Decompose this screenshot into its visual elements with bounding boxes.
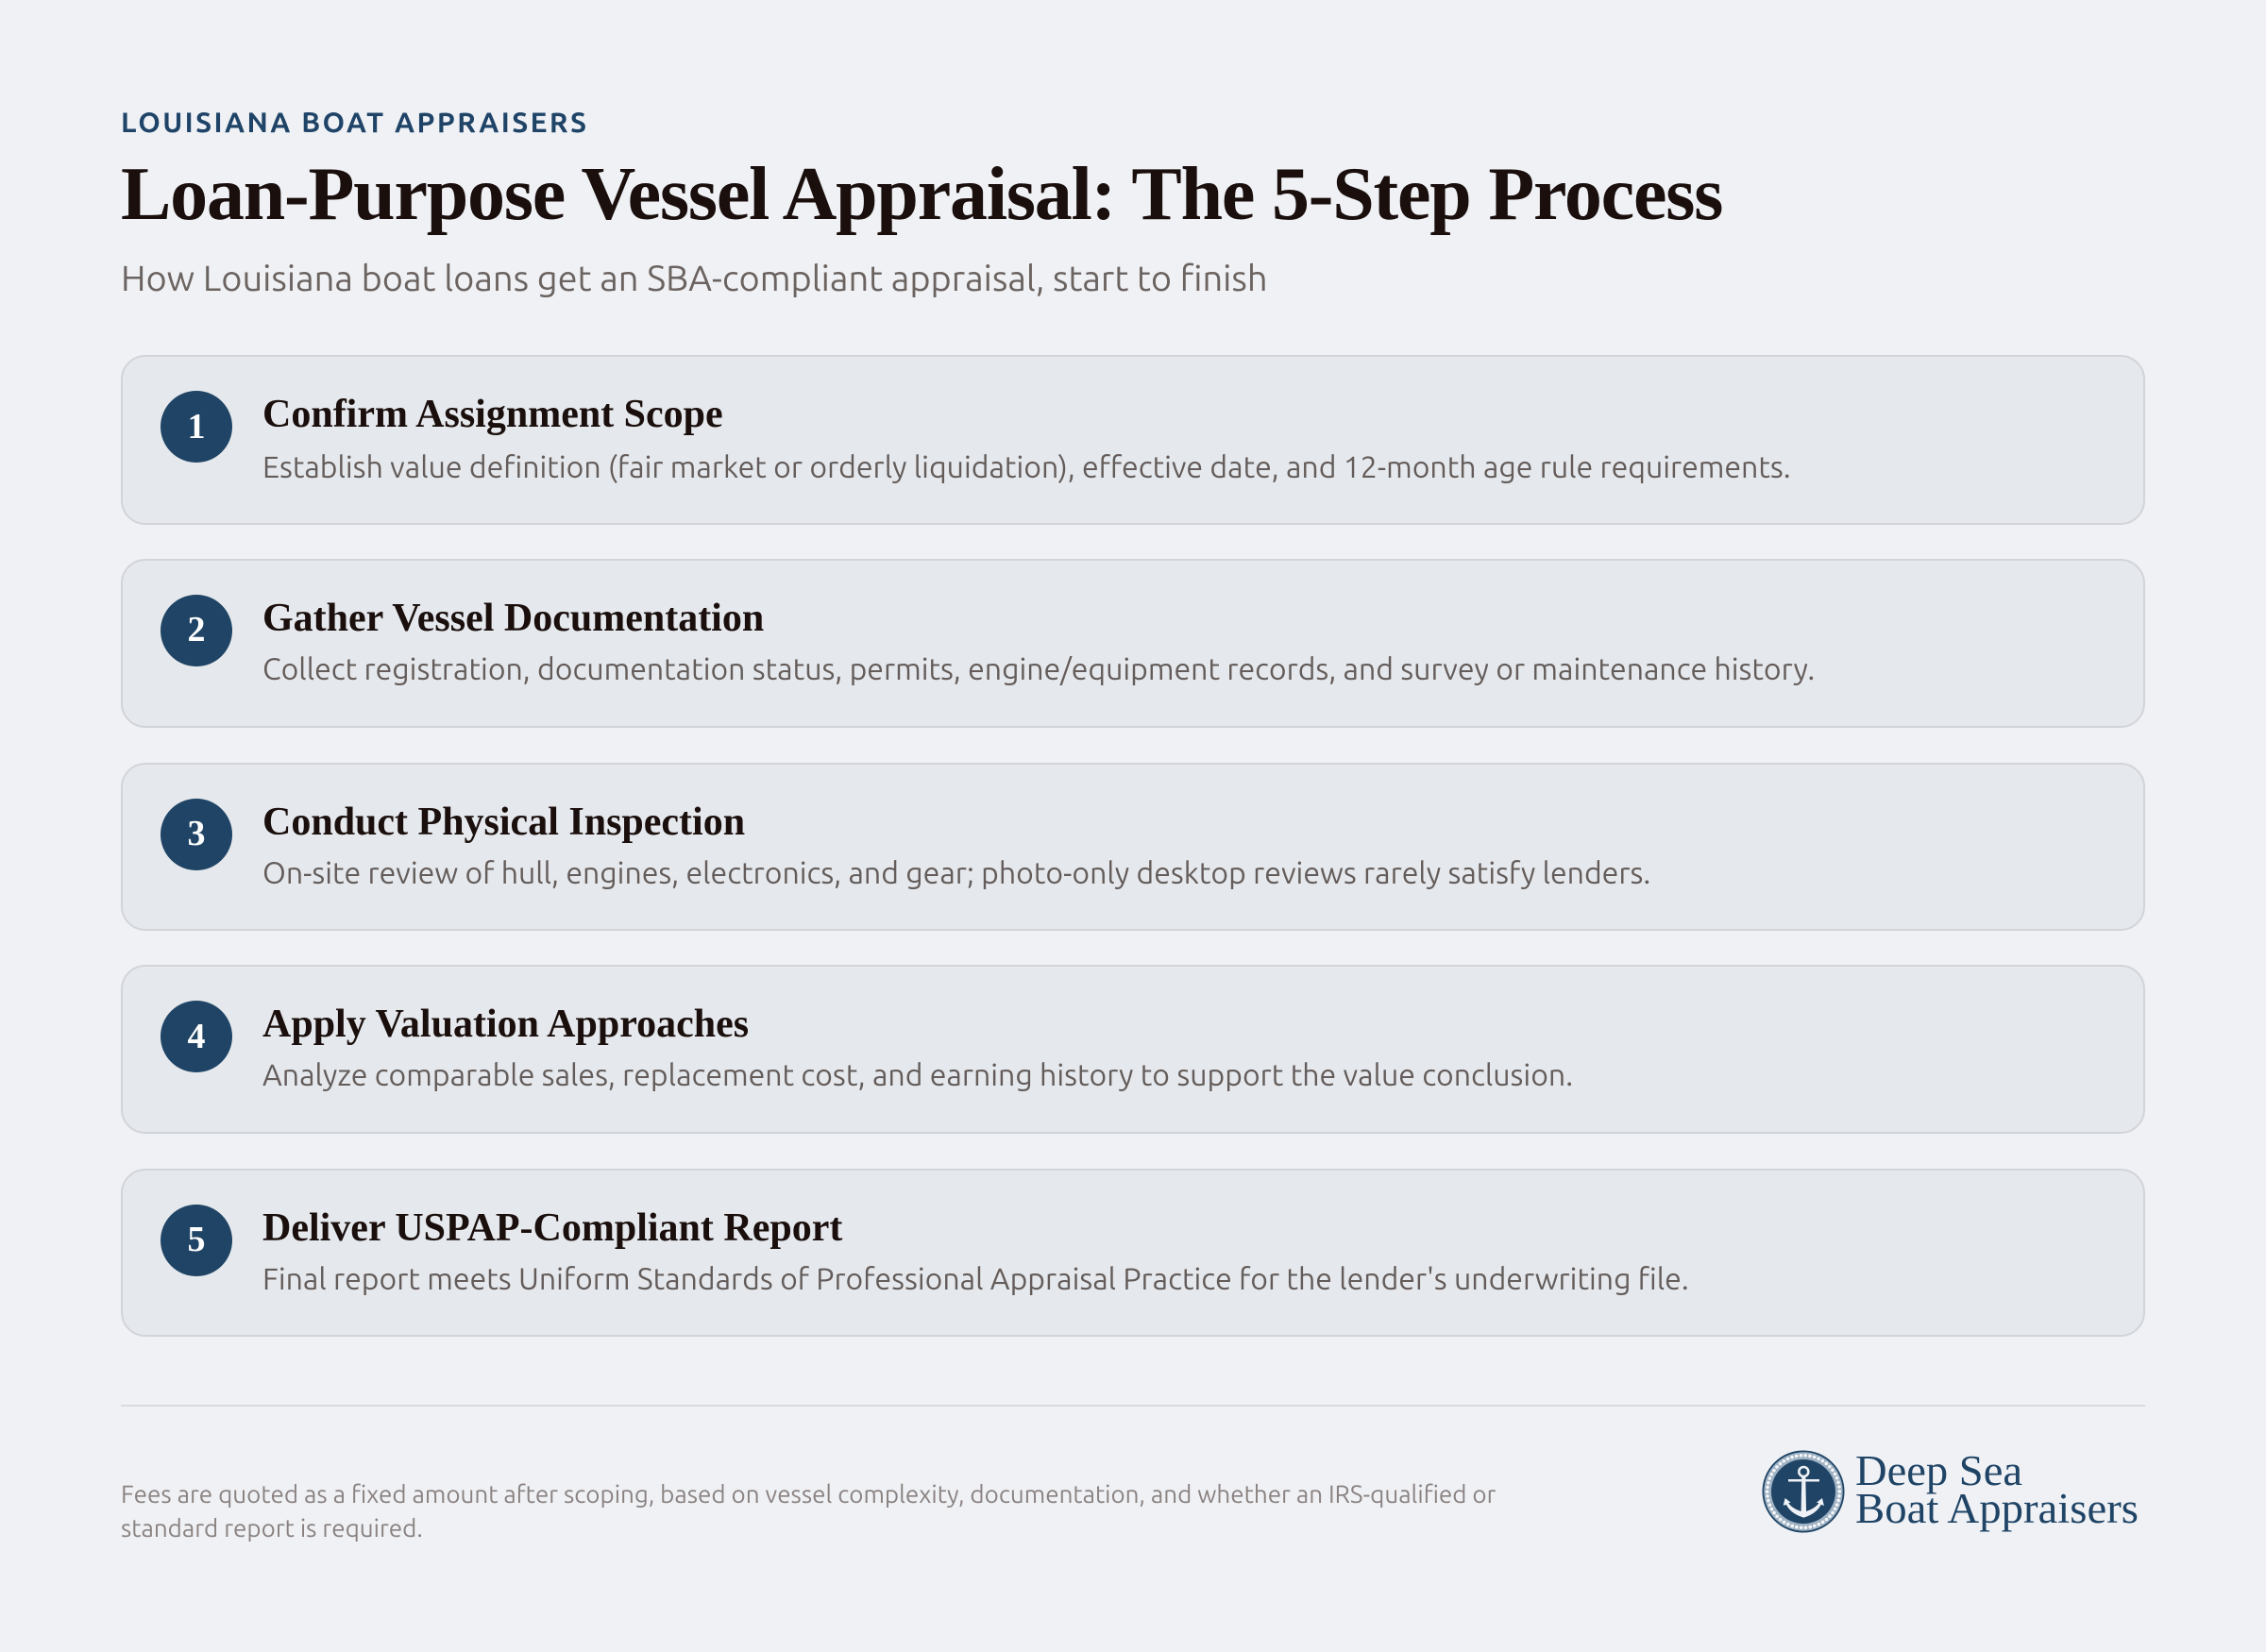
step 1 number badge: 1 — [187, 407, 206, 447]
panel: step 4 — [121, 965, 2145, 1134]
eyebrow label: LOUISIANA BOAT APPRAISERS — [121, 106, 588, 138]
panel: step 3 — [121, 763, 2145, 931]
footnote — [121, 1480, 1496, 1542]
step 5 number badge: 5 — [187, 1220, 206, 1259]
logo: Deep Sea Boat Appraisers — [1762, 1447, 2139, 1533]
step 3 number badge: 3 — [187, 814, 206, 853]
logo wordmark: Deep Sea — [1855, 1447, 2022, 1494]
step 1 number badge — [161, 391, 232, 463]
step 3 heading: Conduct Physical Inspection — [262, 801, 745, 844]
step 2 number badge: 2 — [187, 610, 206, 649]
footnote: Fees are quoted as a fixed amount after scoping, based on vessel complexity, documentation, and whether an IRS-qualified or — [121, 1480, 1496, 1508]
step 3 description: On-site review of hull, engines, electronics, and gear; photo-only desktop reviews rarely satisfy lenders. — [262, 856, 1650, 890]
step 4 heading: Apply Valuation Approaches — [262, 1003, 749, 1046]
subtitle: How Louisiana boat loans get an SBA-compliant appraisal, start to finish — [121, 259, 1268, 298]
step 3 number badge — [161, 799, 232, 870]
icon: anchor medallion — [1763, 1451, 1844, 1532]
step 5 heading: Deliver USPAP-Compliant Report — [262, 1206, 842, 1250]
step 4 number badge: 4 — [187, 1017, 206, 1056]
panel: step 2 — [121, 559, 2145, 728]
step 2 heading: Gather Vessel Documentation — [262, 597, 764, 640]
title: Loan-Purpose Vessel Appraisal: The 5-Step Process — [121, 153, 1722, 236]
step 1 heading: Confirm Assignment Scope — [262, 393, 723, 436]
step 1 description: Establish value definition (fair market or orderly liquidation), effective date, and 12-month age rule requirements. — [262, 450, 1791, 484]
logo wordmark — [1855, 1447, 2139, 1532]
panel: step 1 — [121, 355, 2145, 525]
step 2 description: Collect registration, documentation status, permits, engine/equipment records, and survey or maintenance history. — [262, 652, 1815, 686]
logo wordmark: Boat Appraisers — [1855, 1485, 2139, 1532]
step 5 description: Final report meets Uniform Standards of Professional Appraisal Practice for the lender's underwriting file. — [262, 1262, 1689, 1296]
step 4 description: Analyze comparable sales, replacement cost, and earning history to support the value conclusion. — [262, 1058, 1573, 1092]
panel: step 5 — [121, 1169, 2145, 1337]
step 4 number badge — [161, 1001, 232, 1072]
footnote: standard report is required. — [121, 1514, 423, 1542]
step 5 number badge — [161, 1205, 232, 1276]
step 2 number badge — [161, 595, 232, 666]
